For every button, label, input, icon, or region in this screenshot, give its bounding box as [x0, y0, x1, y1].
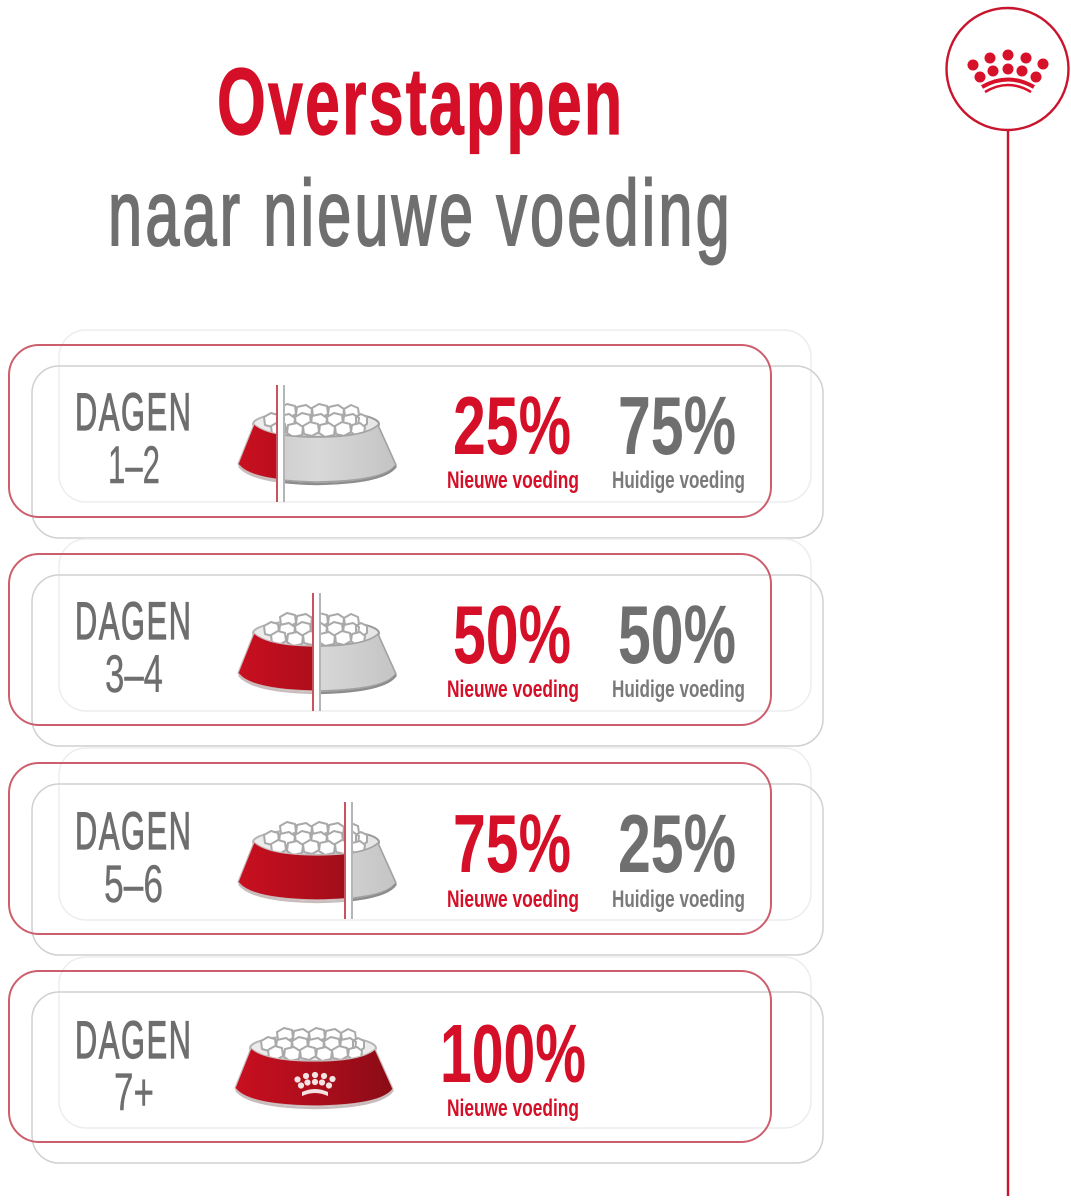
current food stat [612, 797, 745, 913]
new food stat [447, 379, 579, 494]
day label: DAGEN [75, 384, 191, 442]
day label: DAGEN [75, 803, 191, 861]
new food stat: 50% [453, 588, 571, 681]
day label [75, 803, 191, 914]
panel: dagen 7+ [9, 957, 823, 1163]
day label: 7+ [114, 1063, 154, 1122]
new food stat [440, 1007, 586, 1122]
new food stat: Nieuwe voeding [447, 676, 579, 703]
icon: bowl 75 percent [238, 802, 396, 919]
current food stat [612, 379, 745, 494]
current food stat: Huidige voeding [612, 676, 745, 703]
day label [75, 593, 191, 704]
new food stat: Nieuwe voeding [447, 467, 579, 494]
panel: dagen 5-6 [9, 748, 823, 955]
icon: full red bowl with crown [235, 1028, 393, 1108]
icon: bowl 50 percent [238, 593, 396, 711]
current food stat: 75% [618, 379, 736, 472]
day label: 3–4 [105, 645, 163, 704]
title [108, 49, 730, 265]
current food stat: 50% [618, 588, 736, 681]
day label: DAGEN [75, 593, 191, 651]
panel: dagen 1-2 [9, 330, 823, 538]
timeline with crown logo [946, 8, 1068, 1196]
panel: dagen 3-4 [9, 539, 823, 746]
day label [75, 1012, 191, 1122]
current food stat: Huidige voeding [612, 886, 745, 913]
new food stat [447, 588, 579, 703]
current food stat [612, 588, 745, 703]
new food stat: 75% [453, 797, 571, 890]
title line 2: naar nieuwe voeding [108, 161, 730, 265]
new food stat: 25% [453, 379, 571, 472]
title line 1: Overstappen [217, 49, 622, 155]
day label: 1–2 [108, 436, 160, 495]
day label: 5–6 [104, 855, 163, 914]
new food stat: Nieuwe voeding [447, 1095, 579, 1122]
new food stat [447, 797, 579, 913]
current food stat: Huidige voeding [612, 467, 745, 494]
day label: DAGEN [75, 1012, 191, 1070]
icon: bowl 25 percent [238, 385, 396, 502]
timeline line [1007, 130, 1009, 1196]
day label [75, 384, 191, 495]
new food stat: Nieuwe voeding [447, 886, 579, 913]
current food stat: 25% [618, 797, 736, 890]
icon: crown logo circle [946, 8, 1068, 130]
new food stat: 100% [440, 1007, 586, 1100]
